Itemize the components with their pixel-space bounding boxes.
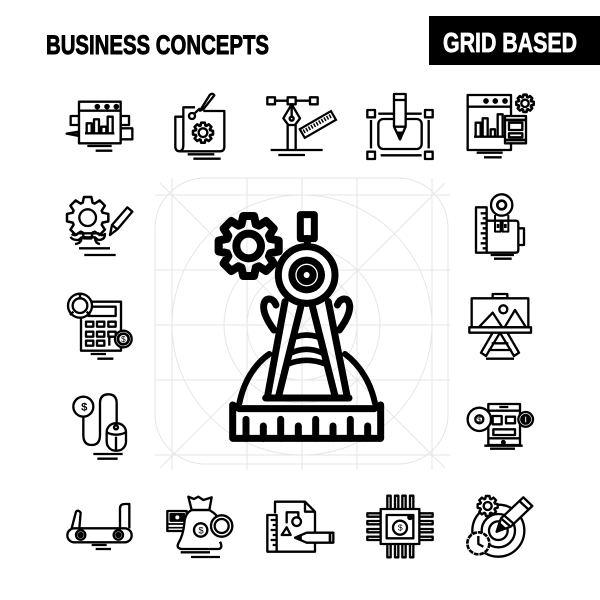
bottom right icons xyxy=(367,496,532,557)
main icon: compass, gear and protractor xyxy=(219,215,381,438)
badge: grid based xyxy=(429,16,600,65)
protractor arc xyxy=(239,354,375,403)
icon: mobile with coins: $ xyxy=(477,415,481,424)
icon: mug, ruler and bulb xyxy=(476,194,524,259)
icon: easel with picture xyxy=(469,294,531,359)
icon: money bag with cash and ring xyxy=(167,497,232,557)
ruler base xyxy=(233,405,381,438)
icon: mouse with dollar coin: $ xyxy=(81,402,88,414)
icon: ruler on pen tool xyxy=(300,111,336,138)
compass legs xyxy=(266,302,349,398)
bottom row icons xyxy=(67,497,333,557)
compass ears xyxy=(264,299,350,330)
icon: tool knife xyxy=(67,504,132,549)
icon: document with shapes and pencil xyxy=(267,502,333,552)
icon: mouse with dollar coin xyxy=(73,394,126,459)
icon: browser chart xyxy=(67,102,132,151)
icon: target with pencil, gear and clock xyxy=(467,496,532,557)
icon: artboard with pencil xyxy=(367,94,433,159)
icon: chip with dollar: $ xyxy=(398,523,403,533)
icon: pen tool xyxy=(267,97,323,155)
icon: blueprint with gear and brush xyxy=(175,94,224,159)
construction grid xyxy=(155,178,450,470)
compass head xyxy=(278,247,335,303)
icon row top right xyxy=(367,94,534,159)
compass handle xyxy=(300,215,314,245)
title: BUSINESS CONCEPTS xyxy=(46,30,269,60)
icon: calculator with chart and coin xyxy=(68,294,132,359)
icon: gear wrench pencil xyxy=(67,197,132,255)
icon: money bag with cash and ring: $ xyxy=(198,525,204,535)
gear xyxy=(219,216,279,276)
left column icons xyxy=(67,197,132,459)
icon: calculator with chart and coin: $ xyxy=(121,335,126,344)
icon row top: dashboard, blueprint xyxy=(67,94,323,159)
right column icons xyxy=(468,194,533,449)
icon: browser analytics and mobile xyxy=(468,95,534,157)
icon: chip with dollar xyxy=(367,496,433,557)
icon: mobile with coins xyxy=(468,404,533,449)
